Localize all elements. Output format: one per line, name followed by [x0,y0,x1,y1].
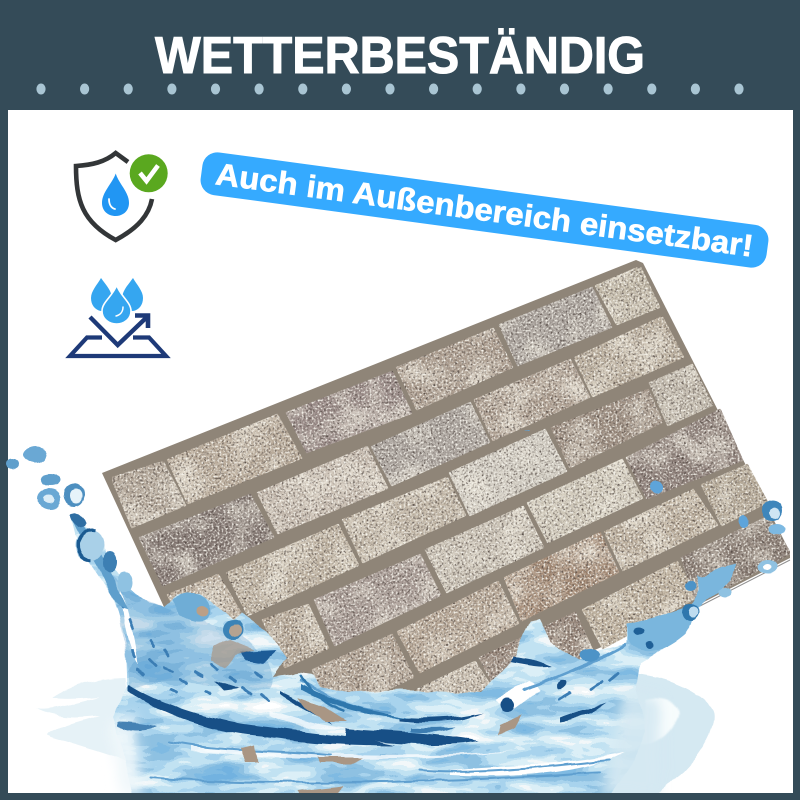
main water body [70,515,683,796]
splash crown right [580,565,735,661]
icon: shield with water drop and check [76,153,168,240]
white ripple highlight right [640,699,679,745]
bricks [112,267,790,715]
droplets on the bricks [121,364,785,573]
mid-blue eddies [150,645,625,783]
small flecks in the foam [108,580,659,715]
brick panel [102,260,790,735]
dotted divider row [36,84,744,94]
thin lower panel edge [700,560,790,606]
callout pill: outdoor use: Auch im Außenbereich einsetzbar! [214,156,755,264]
water splash [7,364,785,796]
pale ripples on the surface [35,672,713,796]
spray column and droplets [7,447,133,610]
soft blend of body edges into the pale ripple [108,690,660,796]
blue shading around the crest [100,560,272,690]
mortar backing [102,260,790,735]
dark water streaks [117,656,607,746]
splash crest left [172,593,345,712]
brick patches showing through water [212,640,522,794]
title: WETTERBESTÄNDIG [155,27,645,85]
white highlights [120,590,625,776]
bottom frame strip over the water [0,793,800,800]
icon: water drops on waterproof membrane [70,278,166,356]
